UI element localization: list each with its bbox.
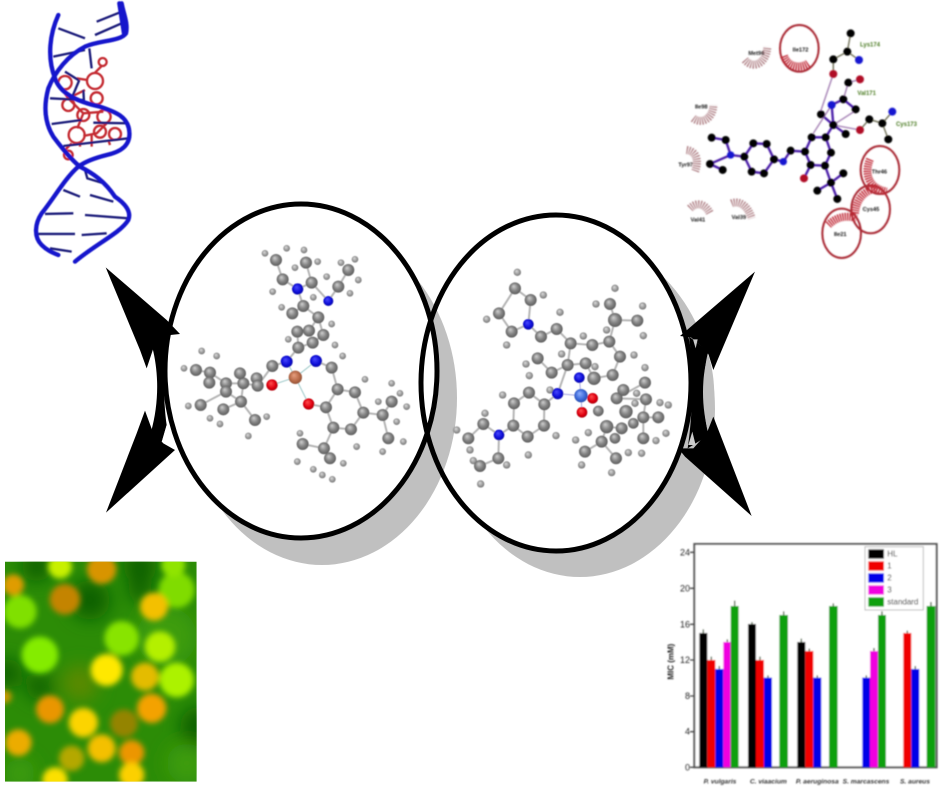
x axis labels [704, 778, 930, 785]
arrow: curved shaft [151, 334, 168, 443]
residue labels: Lys174 [860, 43, 881, 49]
bars: complex 3 [723, 642, 878, 767]
x axis labels: C. viaacium [750, 778, 787, 785]
bars: standard [731, 606, 935, 767]
residue labels: Ile98 [695, 104, 708, 110]
y tick labels: 8 [685, 691, 690, 701]
y tick labels: 0 [685, 762, 690, 772]
bars: complex 2 [715, 669, 919, 767]
intercalated red complex [55, 58, 121, 159]
y ticks [690, 552, 694, 767]
arrows pointing left: to DNA and fluorescence image [106, 267, 180, 513]
DNA helix with intercalated complex [36, 3, 129, 262]
legend: 2 [887, 574, 892, 583]
legend [865, 547, 923, 610]
y tick labels [680, 547, 690, 772]
x axis labels: S. marcascens [843, 778, 890, 785]
fluorescence microscopy image of cells [5, 562, 197, 782]
right circle outline [421, 215, 691, 551]
green cells [3, 553, 195, 697]
helix strands [36, 3, 129, 262]
hydrophobic contact arcs, highlighted [784, 56, 887, 225]
bars: complex 1 [707, 633, 911, 767]
legend: 1 [887, 562, 892, 571]
right circle fill [421, 215, 691, 551]
legend: HL [887, 550, 898, 559]
residue labels: Val39 [732, 215, 746, 221]
shadow of right circle [445, 241, 715, 577]
y tick labels: 16 [680, 619, 690, 629]
background tones [5, 562, 197, 782]
arrow: curved shaft [688, 337, 709, 448]
residue labels: Tyr97 [678, 163, 693, 169]
arrows pointing right: to docking diagram and bar chart [678, 272, 755, 516]
x axis labels: P. vulgaris [704, 778, 737, 785]
y axis title: MIC (mM) [666, 643, 675, 680]
residue labels: Met96 [748, 51, 764, 57]
residue labels: Cys45 [863, 207, 879, 213]
arrow: down-right to chart [678, 417, 752, 516]
arrow: up-left to DNA [106, 267, 180, 368]
hydrogen bonds and residue bonds [813, 33, 892, 139]
yellow and orange cells [0, 555, 168, 790]
shadow of left circle [187, 231, 457, 565]
residue labels: Ile172 [793, 48, 808, 54]
arrow: down-left to cell image [106, 411, 175, 513]
residue labels [678, 43, 918, 238]
error bars [703, 601, 931, 678]
y tick labels: 24 [680, 547, 690, 557]
left molecule: copper complex [181, 245, 410, 483]
left circle [165, 204, 437, 538]
ligand bonds [710, 99, 856, 199]
legend: 3 [887, 586, 892, 595]
residue labels: Thr46 [872, 169, 887, 175]
residue labels: Val41 [691, 218, 705, 224]
atoms: carbon [706, 29, 892, 203]
docking interaction diagram [678, 25, 918, 258]
base pairs [38, 12, 128, 252]
residue labels: Cys173 [896, 122, 918, 128]
bars: HL [699, 624, 805, 767]
x axis labels: S. aureus [900, 778, 930, 785]
atoms: oxygen [800, 70, 864, 182]
plot frame [694, 544, 937, 767]
y tick labels: 20 [680, 583, 690, 593]
residue labels: Ile21 [834, 232, 847, 238]
legend: standard [887, 598, 918, 607]
y tick labels: 12 [680, 655, 690, 665]
cells [0, 553, 195, 790]
bar chart: MIC values [666, 544, 937, 785]
highlighted residue rings [780, 25, 899, 258]
arrow: up-right to docking [680, 272, 755, 370]
hydrophobic contact arcs, plain [687, 47, 767, 218]
atoms: nitrogen [727, 56, 896, 165]
residue labels: Val171 [857, 91, 877, 97]
x axis labels: P. aeruginosa [796, 778, 839, 785]
y tick labels: 4 [685, 727, 690, 737]
right molecule: metal complex [453, 269, 672, 488]
